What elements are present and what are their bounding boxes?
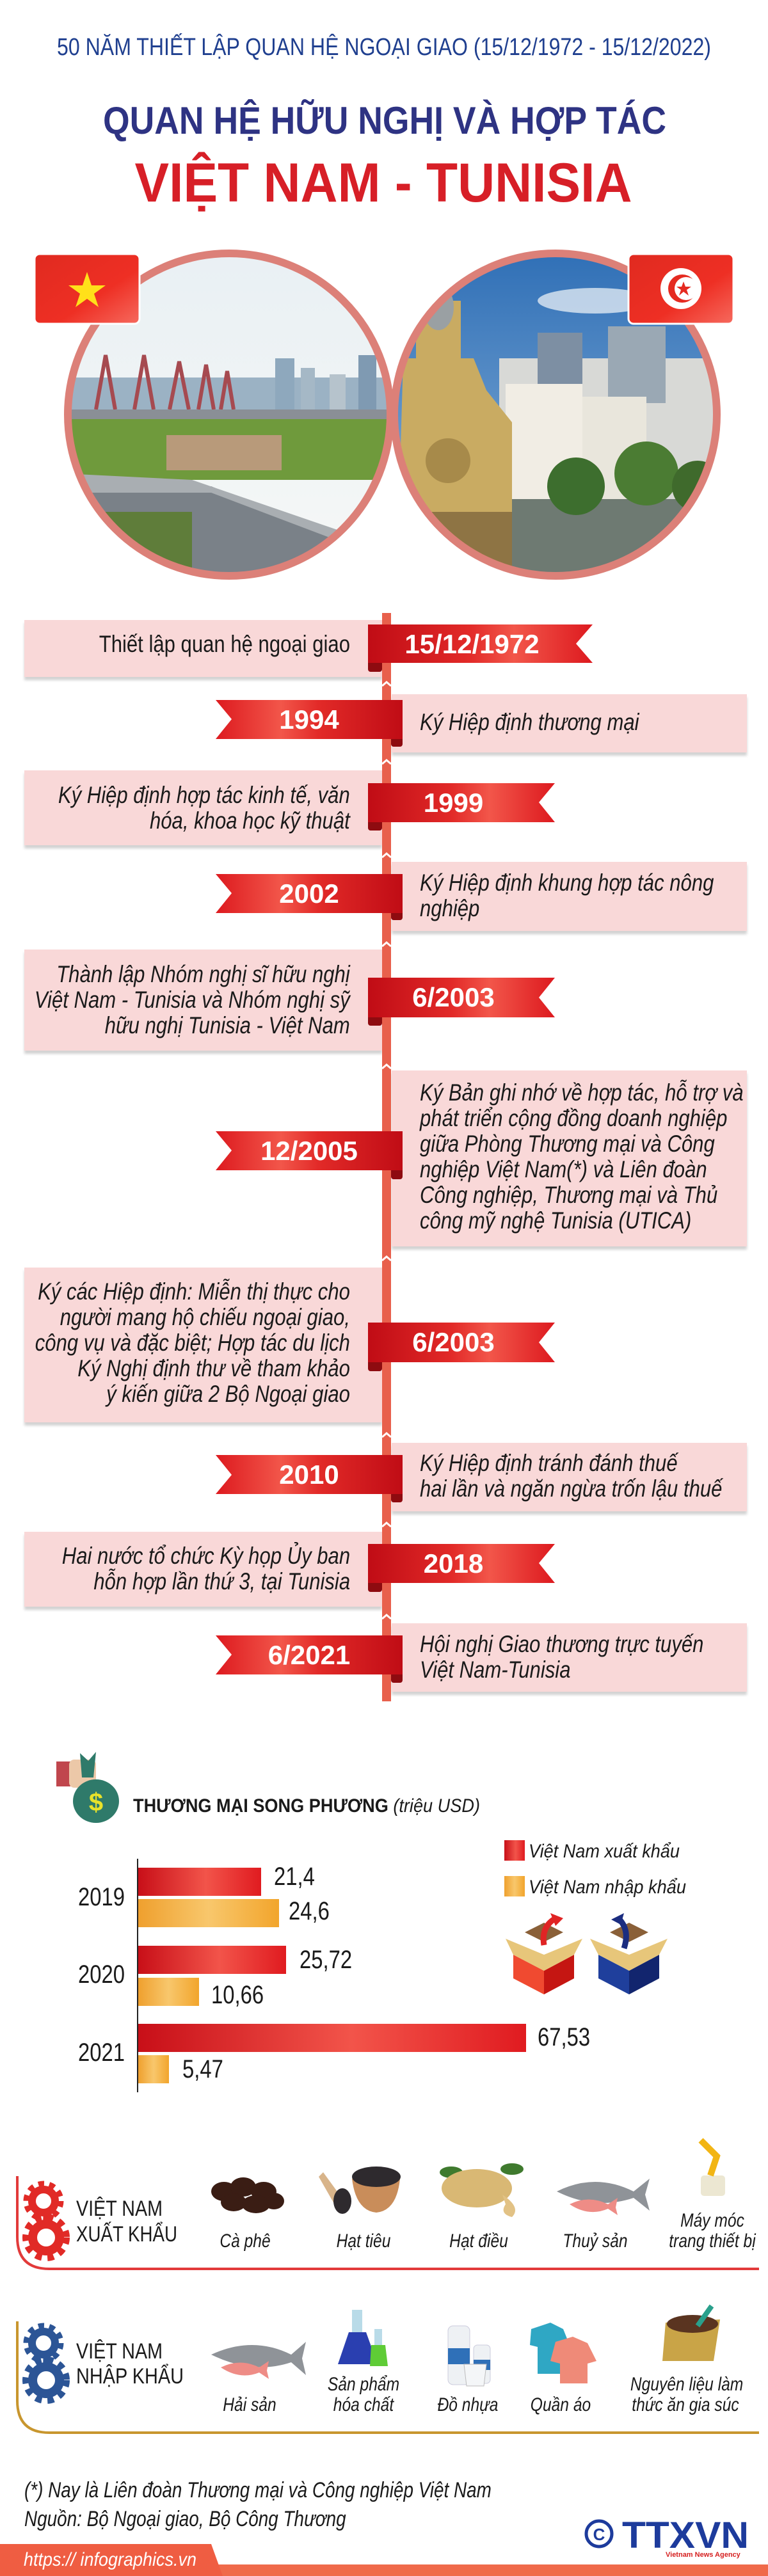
ribbon 1999 [368, 783, 555, 831]
text: Thuỷ sản [563, 2230, 628, 2252]
panel: export/import products [16, 2138, 759, 2434]
text: công vụ và đặc biệt; Hợp tác du lịch [35, 1330, 350, 1356]
text: phát triển cộng đồng doanh nghiệp [420, 1105, 727, 1131]
text: Cà phê [220, 2230, 271, 2252]
text: Thiết lập quan hệ ngoại giao [99, 631, 350, 657]
text: hai lần và ngăn ngừa trốn lậu thuế [420, 1475, 722, 1502]
text: 6/2003 [412, 1327, 495, 1357]
icon: machine [701, 2140, 725, 2196]
text: 1994 [279, 704, 339, 735]
text: Ký Hiệp định khung hợp tác nông [420, 870, 714, 896]
chart labels [78, 1863, 590, 2083]
text: 24,6 [289, 1897, 330, 1925]
product labels [220, 2210, 756, 2415]
icon: coffee [211, 2177, 284, 2213]
logo: TTXVN: TTXVN [622, 2515, 749, 2556]
ribbon 6/2021 [216, 1635, 403, 1683]
text: hữu nghị Tunisia - Việt Nam [105, 1012, 350, 1038]
text: 21,4 [274, 1863, 315, 1891]
text: Đồ nhựa [438, 2394, 498, 2415]
text: Việt Nam - Tunisia và Nhóm nghị sỹ [35, 987, 350, 1013]
text: 2010 [279, 1459, 339, 1490]
ribbon 6/2003 b [368, 1323, 555, 1371]
text: 1999 [424, 788, 483, 818]
ribbon 2002 [216, 874, 403, 920]
flag: Vietnam [35, 254, 140, 324]
text: hóa, khoa học kỹ thuật [150, 807, 350, 834]
text: nghiệp Việt Nam(*) và Liên đoàn [420, 1156, 707, 1182]
text: 67,53 [538, 2023, 590, 2051]
text: Hai nước tổ chức Kỳ họp Ủy ban [62, 1543, 350, 1569]
timeline line and ribbons [216, 613, 593, 1701]
text: Sản phẩm [328, 2374, 399, 2395]
text: 6/2021 [268, 1640, 350, 1670]
text: Máy móc [680, 2210, 744, 2231]
text: nghiệp [420, 895, 479, 921]
icon: red gears [26, 2184, 67, 2258]
vertical line [382, 613, 391, 1701]
legend: Việt Nam nhập khẩu [529, 1877, 686, 1898]
text: 25,72 [300, 1946, 352, 1974]
photo: Hanoi [72, 257, 387, 572]
photo: Tunis [398, 257, 713, 572]
text: 15/12/1972 [404, 629, 540, 659]
text: 2002 [279, 879, 339, 909]
text: Ký Bản ghi nhớ về hợp tác, hỗ trợ và [420, 1079, 744, 1106]
import frame [17, 2321, 759, 2433]
text: Ký các Hiệp định: Miễn thị thực cho [38, 1278, 350, 1305]
text: người mang hộ chiếu ngoại giao, [60, 1304, 350, 1330]
bar chart [138, 1859, 526, 2092]
icon: clothes [530, 2323, 596, 2383]
source: Nguồn: Bộ Ngoại giao, Bộ Công Thương [24, 2507, 346, 2531]
text: Nguyên liệu làm [630, 2374, 743, 2395]
export frame [17, 2176, 759, 2269]
icon: money bag [56, 1752, 119, 1823]
icon: export/import boxes [506, 1913, 668, 1994]
text: Việt Nam-Tunisia [420, 1657, 570, 1683]
logo: TTXVN [585, 2515, 749, 2559]
icon: seafood import [211, 2342, 306, 2379]
logo: TTXVN: C [593, 2525, 605, 2544]
text: Ký Hiệp định thương mại [420, 709, 639, 735]
heading: export: VIỆT NAM [76, 2197, 163, 2221]
ribbon 1994 [216, 700, 403, 747]
ribbon 2010 [216, 1455, 403, 1502]
text: Ký Hiệp định tránh đánh thuế [420, 1450, 678, 1476]
text: thức ăn gia súc [632, 2394, 739, 2415]
text: 2020 [78, 1960, 125, 1989]
text: 10,66 [211, 1981, 264, 2009]
text: 2019 [78, 1883, 125, 1911]
date labels [260, 629, 540, 1670]
text: Ký Hiệp định hợp tác kinh tế, văn [58, 782, 350, 808]
text: trang thiết bị [669, 2230, 756, 2252]
panel: export/import products: NHẬP KHẨU [76, 2364, 184, 2389]
icon: money bag: $ [89, 1788, 103, 1817]
text: Ký Nghị định thư về tham khảo [77, 1355, 350, 1381]
timeline texts [35, 631, 744, 1683]
text: Thành lập Nhóm nghị sĩ hữu nghị [56, 961, 350, 987]
photo circles [36, 250, 732, 580]
text: 2018 [424, 1548, 483, 1578]
text: Hạt tiêu [337, 2230, 390, 2252]
legend [504, 1840, 686, 1898]
footnote: (*) Nay là Liên đoàn Thương mại và Công nghiệp Việt Nam [24, 2478, 492, 2502]
icon: cashew [440, 2163, 524, 2217]
chart title: THƯƠNG MẠI SONG PHƯƠNG (triệu USD) [133, 1795, 480, 1817]
legend: Việt Nam xuất khẩu [529, 1841, 680, 1862]
footer bar with url [0, 2544, 768, 2576]
text: hỗn hợp lần thứ 3, tại Tunisia [93, 1568, 350, 1594]
panel: export/import products: XUẤT KHẨU [76, 2222, 177, 2246]
text: 12/2005 [260, 1136, 358, 1166]
flag: Tunisia [628, 254, 733, 324]
timeline boxes [24, 620, 382, 677]
icon: plastics [448, 2326, 490, 2386]
text: 5,47 [182, 2055, 223, 2083]
ribbon 6/2003 a [368, 978, 555, 1026]
icon: chemicals [338, 2310, 388, 2366]
title line 2: VIỆT NAM - TUNISIA [134, 152, 632, 214]
ribbon 1972 [368, 624, 593, 672]
title line 1: QUAN HỆ HỮU NGHỊ VÀ HỢP TÁC [103, 99, 666, 142]
ribbon 2018 [368, 1544, 555, 1592]
footer bar with url: https:// infographics.vn [24, 2549, 196, 2570]
text: Quần áo [531, 2394, 591, 2415]
icon: pepper [319, 2167, 401, 2214]
text: Hội nghị Giao thương trực tuyến [420, 1631, 703, 1657]
icon: blue gears [26, 2326, 67, 2401]
timeline [23, 620, 748, 1696]
trade chart section [56, 1752, 686, 2092]
text: ý kiến giữa 2 Bộ Ngoại giao [106, 1381, 350, 1407]
ribbon 12/2005 [216, 1131, 403, 1179]
text: 6/2003 [412, 982, 495, 1012]
text: công mỹ nghệ Tunisia (UTICA) [420, 1207, 691, 1234]
icon: seafood export [557, 2179, 650, 2215]
text: Công nghiệp, Thương mại và Thủ [420, 1182, 717, 1208]
header titles [57, 33, 711, 214]
text: hóa chất [333, 2394, 394, 2415]
logo: TTXVN: Vietnam News Agency [666, 2551, 741, 2559]
text: Hạt điều [449, 2230, 508, 2252]
text: giữa Phòng Thương mại và Công [420, 1131, 715, 1157]
heading: import: VIỆT NAM [76, 2339, 163, 2364]
icon: feed sack [662, 2306, 720, 2361]
text: 2021 [78, 2039, 125, 2067]
text: Hải sản [223, 2394, 276, 2415]
